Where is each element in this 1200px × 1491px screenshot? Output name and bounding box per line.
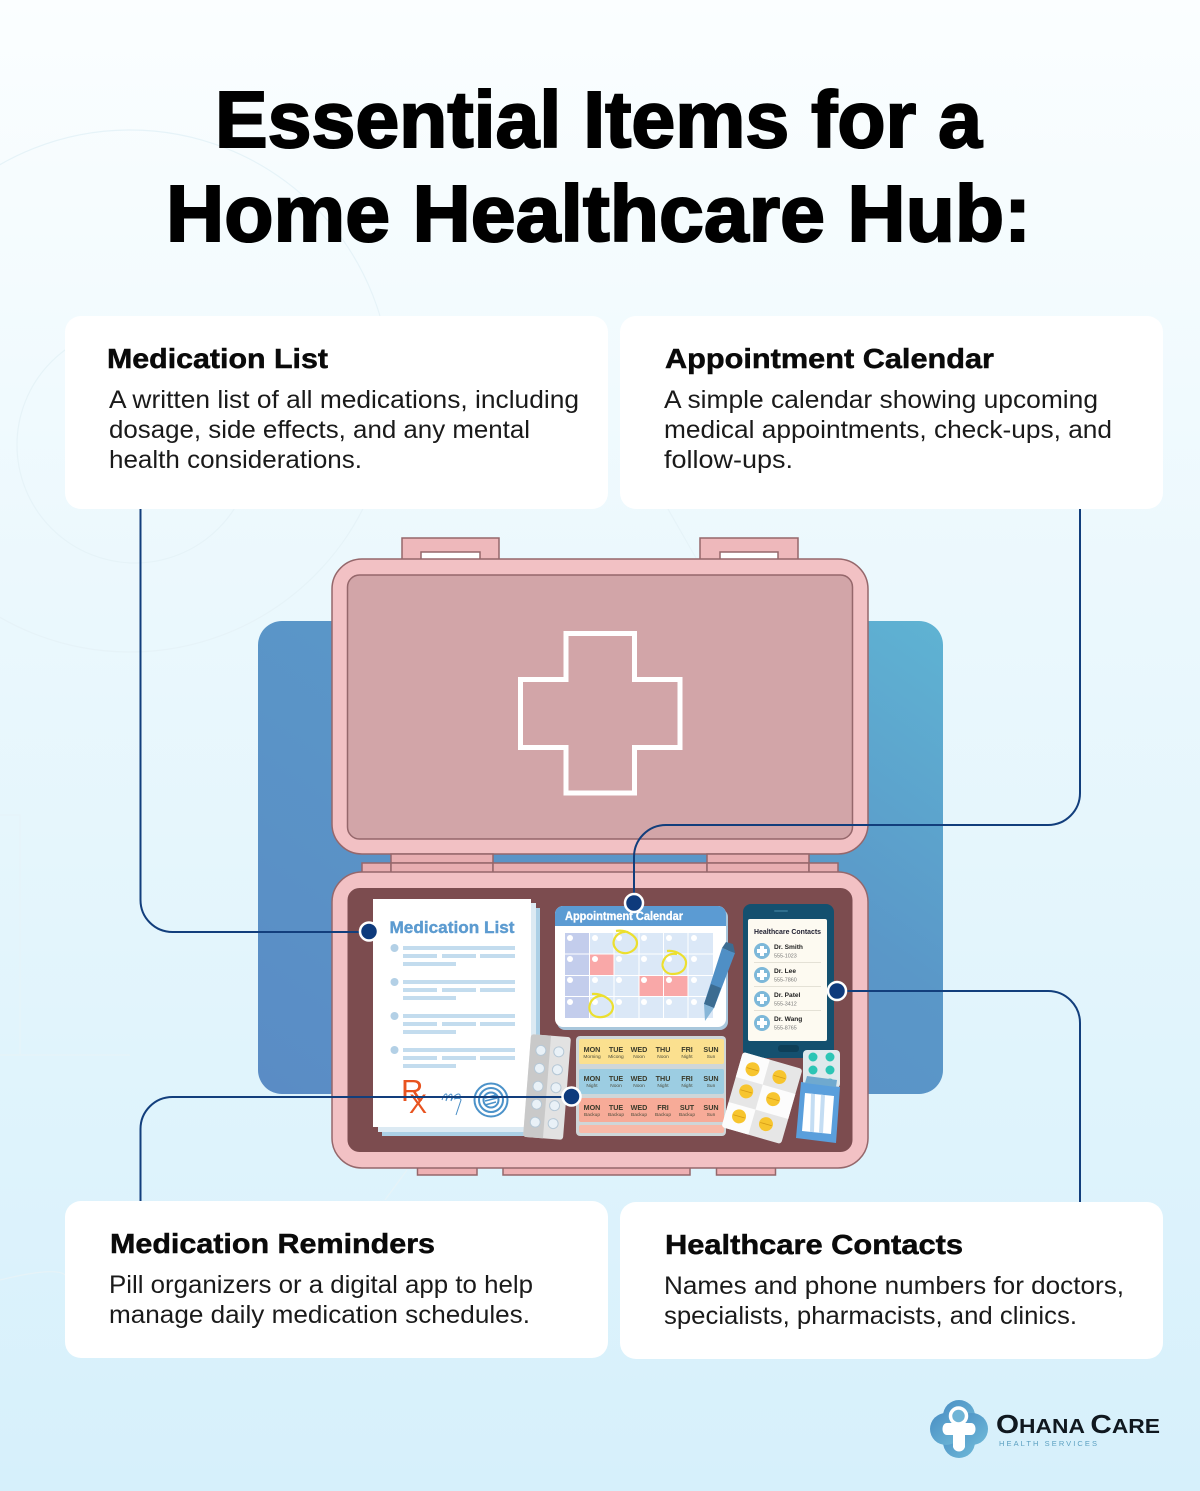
organizer: backup row: WED [631, 1103, 647, 1112]
connector dots [360, 894, 846, 1106]
organizer: morning row: Morning [583, 1054, 601, 1060]
organizer: morning row: Noon [633, 1054, 645, 1060]
panel: appointment calendar [620, 316, 1163, 509]
organizer: backup row: TUE [609, 1103, 623, 1112]
case base [332, 872, 868, 1168]
document: medication list [373, 899, 540, 1136]
organizer: morning row: Night [681, 1054, 693, 1060]
panel: medication list: Medication List [107, 343, 328, 374]
case latches [402, 538, 798, 562]
yellow circled dates [589, 931, 686, 1017]
icon: clover cross [930, 1400, 988, 1458]
organizer: night row [579, 1069, 724, 1094]
organizer: morning row: FRI [681, 1045, 693, 1054]
panel: medication list [65, 316, 608, 509]
blue backdrop [258, 621, 943, 1094]
phone: Healthcare Contacts [754, 927, 821, 936]
title: Home Healthcare Hub: [166, 169, 1031, 258]
panel: healthcare contacts: Names and phone numbers for doctors, [664, 1272, 1124, 1300]
contact icons [754, 943, 770, 1031]
organizer: backup row [579, 1098, 724, 1133]
panel: medication list: dosage, side effects, and any mental [109, 416, 530, 444]
panel: medication list: A written list of all medications, including [109, 386, 579, 414]
organizer: morning row: SUN [703, 1045, 719, 1054]
yellow pill pack [721, 1052, 803, 1144]
organizer: backup row: Sun [707, 1112, 716, 1118]
phone: 555-1023 [774, 954, 797, 960]
organizer: night row: TUE [609, 1074, 623, 1083]
organizer: morning row [579, 1039, 724, 1064]
panel: medication reminders [65, 1201, 608, 1358]
organizer: backup row: Backup [655, 1112, 671, 1118]
organizer: morning row: MON [584, 1045, 600, 1054]
organizer: morning row: THU [656, 1045, 670, 1054]
organizer: night row: Night [586, 1083, 598, 1089]
appointment calendar: Appointment Calendar [565, 911, 684, 923]
organizer: night row: MON [584, 1074, 600, 1083]
case feet [418, 1160, 776, 1175]
panel: medication reminders: Pill organizers or a digital app to help [109, 1271, 533, 1299]
title: Essential Items for a [215, 75, 982, 164]
organizer: night row: Noon [610, 1083, 622, 1089]
phone: Dr. Patel [774, 992, 801, 999]
organizer: backup row: FRI [657, 1103, 669, 1112]
medical case [332, 538, 868, 1175]
document: medication list: Medication List [390, 918, 515, 937]
organizer: backup row: MON [584, 1103, 600, 1112]
organizer: backup row: Backup [584, 1112, 600, 1118]
organizer: night row: Night [657, 1083, 669, 1089]
panel: medication reminders: manage daily medication schedules. [109, 1301, 530, 1329]
icon: Rx symbol: R [401, 1073, 423, 1108]
organizer: morning row: TUE [609, 1045, 623, 1054]
case lid [332, 559, 868, 854]
organizer: night row: Night [681, 1083, 693, 1089]
logo: Ohana Care: OHANA CARE [996, 1409, 1160, 1439]
panel: appointment calendar: follow-ups. [664, 446, 793, 474]
appointment calendar [555, 906, 735, 1030]
organizer: morning row: Noon [657, 1054, 669, 1060]
icon: pen [704, 942, 735, 1021]
organizer: night row: FRI [681, 1074, 693, 1083]
organizer: backup row: Backup [631, 1112, 647, 1118]
panel: healthcare contacts: Healthcare Contacts [665, 1229, 963, 1260]
organizer: morning row: Sun [707, 1054, 716, 1060]
panel: medication list: health considerations. [109, 446, 362, 474]
pill bottle [796, 1050, 840, 1143]
icon: stamp [474, 1084, 508, 1116]
organizer: night row: WED [631, 1074, 647, 1083]
logo: Ohana Care [930, 1400, 1160, 1458]
phone [743, 904, 834, 1058]
organizer: morning row: Micong [608, 1054, 624, 1060]
organizer: night row: THU [656, 1074, 670, 1083]
logo: Ohana Care: HEALTH SERVICES [999, 1439, 1097, 1448]
organizer: night row: SUN [703, 1074, 719, 1083]
icon: Rx symbol: X [409, 1089, 427, 1119]
phone: Dr. Smith [774, 944, 803, 951]
organizer: backup row: Backup [679, 1112, 695, 1118]
case hinges [362, 854, 838, 873]
organizer: night row: Sun [707, 1083, 716, 1089]
panel: medication reminders: Medication Reminders [110, 1228, 435, 1259]
phone: Dr. Wang [774, 1016, 802, 1023]
phone: 555-3412 [774, 1002, 797, 1008]
panel: appointment calendar: Appointment Calendar [665, 343, 994, 374]
phone: Dr. Lee [774, 968, 796, 975]
organizer: backup row: SUN [703, 1103, 719, 1112]
organizer: night row: Noon [633, 1083, 645, 1089]
title [166, 75, 1031, 258]
signature [442, 1094, 461, 1115]
calendar grid [565, 933, 713, 1018]
organizer: backup row: Backup [608, 1112, 624, 1118]
icon: Rx symbol [401, 1073, 427, 1119]
phone: 555-7860 [774, 978, 797, 984]
panel: appointment calendar: A simple calendar showing upcoming [664, 386, 1098, 414]
panel: healthcare contacts [620, 1202, 1163, 1359]
panel: appointment calendar: medical appointments, check-ups, and [664, 416, 1112, 444]
icon: white cross [520, 634, 680, 793]
connector lines [140, 509, 1080, 1202]
blister pack [523, 1034, 571, 1140]
phone: 555-8765 [774, 1026, 797, 1032]
organizer: morning row: WED [631, 1045, 647, 1054]
organizer: backup row: SUT [680, 1103, 695, 1112]
panel: healthcare contacts: specialists, pharmacists, and clinics. [664, 1302, 1077, 1330]
pill organizer [576, 1036, 726, 1136]
